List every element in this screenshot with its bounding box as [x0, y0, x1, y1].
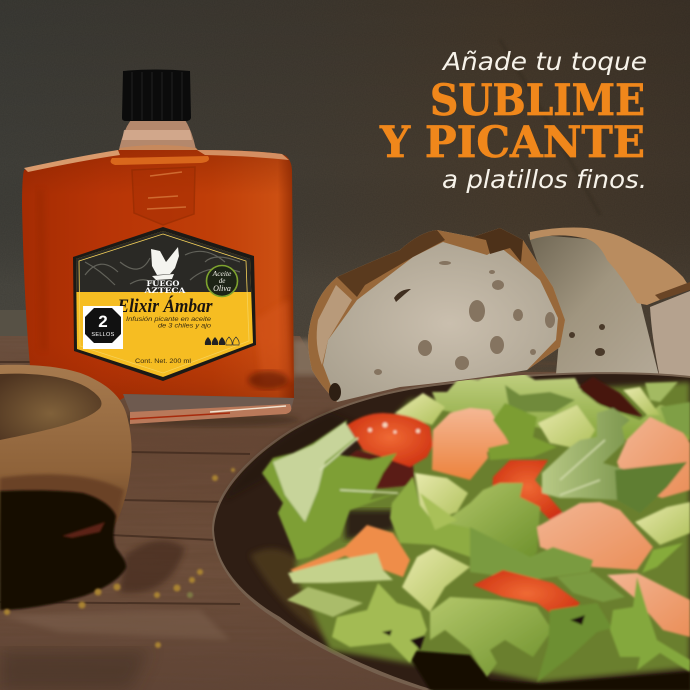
- wooden table: [0, 310, 690, 690]
- plate: [212, 372, 690, 690]
- centre lettuce: [440, 483, 540, 560]
- glass neck: [108, 120, 205, 165]
- eagle logo: [151, 247, 179, 280]
- bread: [308, 228, 690, 402]
- warning seal: [83, 306, 123, 349]
- right bread loaf: [528, 228, 690, 385]
- salmon top: [432, 408, 510, 480]
- embossed crest: [132, 167, 195, 225]
- right lettuce: [540, 406, 630, 501]
- warning seal: 2: [98, 312, 108, 331]
- lettuce by avocado: [390, 477, 470, 557]
- bottle body with amber oil: [22, 150, 294, 400]
- black cap: [122, 70, 191, 121]
- lettuce small top: [488, 403, 557, 460]
- red leaf: [578, 377, 643, 417]
- wooden bowl: [0, 365, 235, 648]
- label: [70, 225, 260, 381]
- lower left leaf two: [287, 587, 363, 617]
- dark leaf holes: [382, 615, 585, 650]
- lower right lettuce: [610, 577, 690, 672]
- mid green band: [470, 527, 593, 580]
- salmon right: [617, 417, 690, 498]
- description: Infusión picante en aceite: [126, 316, 212, 323]
- salmon centre right: [537, 502, 653, 570]
- heat level icons: [205, 337, 239, 345]
- warning seal: SELLOS: [91, 332, 115, 338]
- salad base: [295, 382, 690, 682]
- olive oil badge: [206, 266, 238, 296]
- lower left leaf: [288, 553, 393, 583]
- salmon lower right: [607, 573, 690, 637]
- yellow label panel: [76, 231, 253, 377]
- salad: [262, 370, 690, 690]
- olive oil badge: Oliva: [213, 284, 231, 293]
- olive oil badge: Aceite: [212, 269, 232, 278]
- brand name: FUEGO: [146, 279, 180, 288]
- salmon lower left: [290, 525, 410, 577]
- olive oil badge: de: [219, 277, 225, 285]
- bottle: [22, 70, 300, 427]
- avocado upper right: [538, 405, 595, 450]
- avocado centre: [415, 473, 468, 522]
- bottom centre lettuce: [430, 597, 552, 677]
- top right leaf: [645, 382, 678, 402]
- avocado top left: [395, 393, 445, 425]
- intro line: Añade tu toque: [441, 47, 647, 76]
- headline: sublime: SUBLIME: [430, 76, 645, 126]
- lettuce right of tomato: [557, 572, 625, 602]
- bottom left lettuce: [332, 583, 427, 663]
- label: de 3 chiles y ajo: [158, 322, 212, 330]
- dark pattern band: [76, 231, 252, 374]
- green leaf right: [642, 543, 683, 573]
- bottle shadow: [120, 413, 300, 427]
- net content: Cont. Net. 200 ml: [135, 358, 191, 365]
- closing line: a platillos finos.: [442, 165, 647, 194]
- avocado right: [635, 502, 690, 545]
- front bread slice: [308, 228, 565, 402]
- tomato top left: [347, 413, 433, 467]
- avocado top right: [623, 387, 660, 415]
- product name: Elixir Ámbar: [117, 295, 213, 317]
- background wall: [0, 0, 690, 380]
- headline: y picante: Y PICANTE: [379, 118, 645, 168]
- top lettuce: [432, 370, 690, 440]
- label: AZTECA: [143, 286, 186, 295]
- left lettuce: [262, 420, 398, 560]
- bottom right centre lettuce: [537, 603, 612, 682]
- headline text: [379, 47, 647, 194]
- radicchio: [348, 450, 415, 490]
- tomato lower: [472, 568, 581, 614]
- avocado low: [402, 548, 470, 612]
- tomato centre: [492, 460, 563, 520]
